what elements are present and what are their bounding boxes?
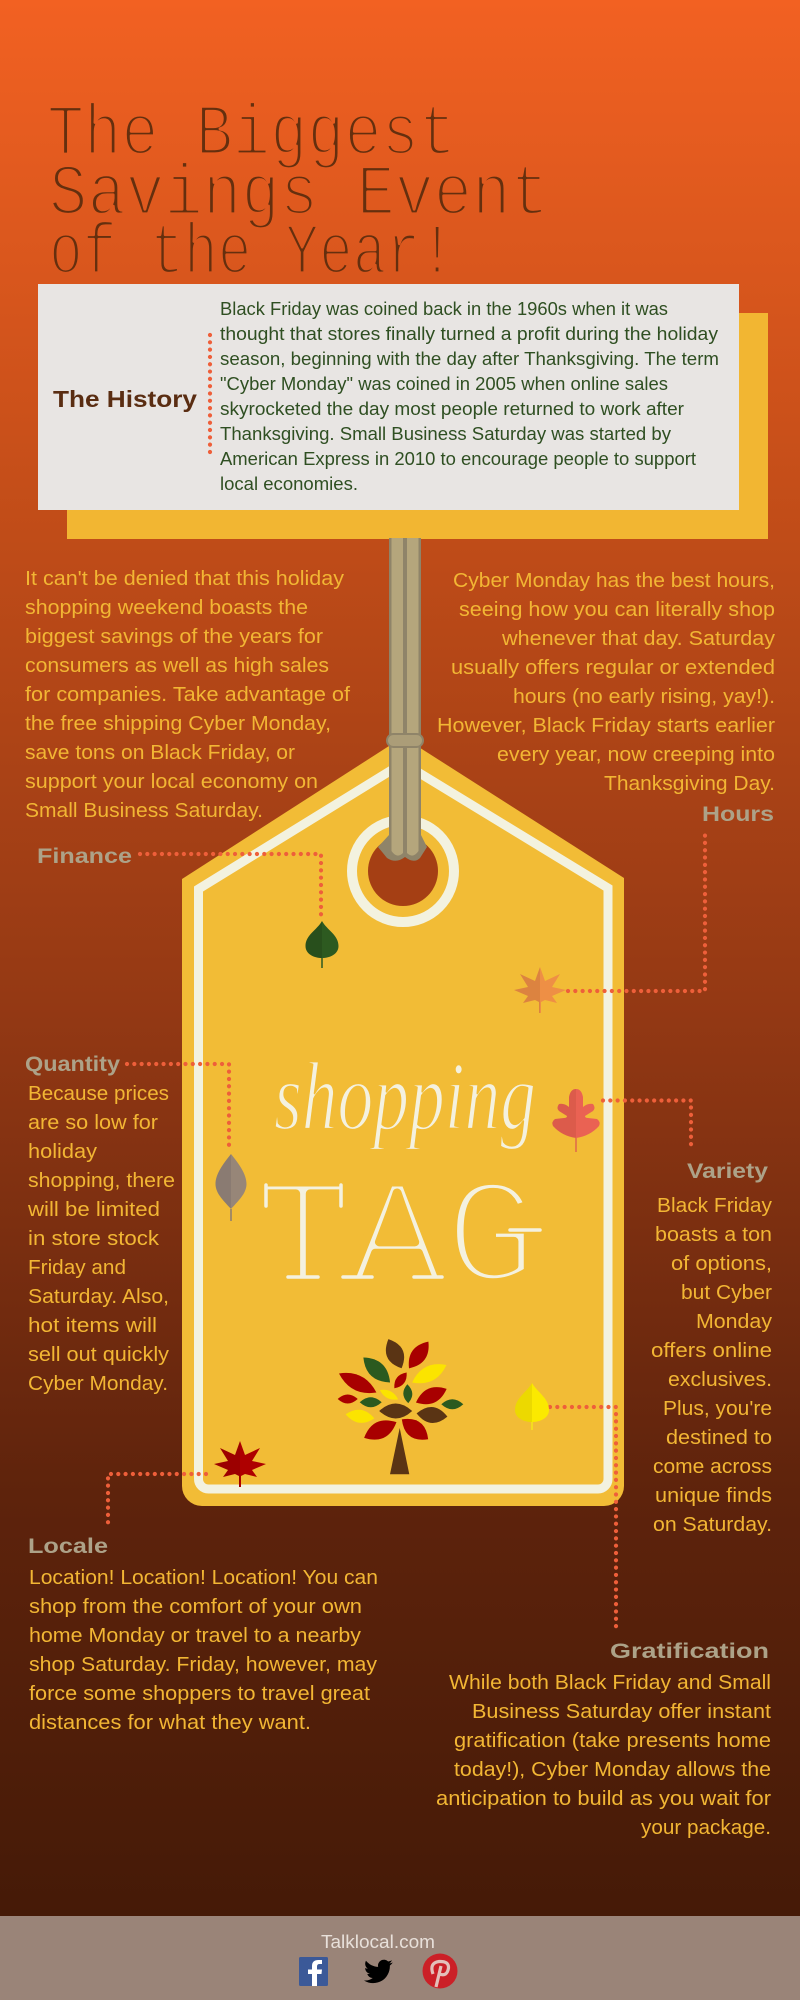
text block: gratification: gratification (take presents home [454, 1730, 771, 1752]
text block: locale: Location! Location! Location! You can [29, 1567, 378, 1589]
connector: variety [603, 1100, 691, 1151]
icon: grey leaf [216, 1154, 246, 1221]
history text: local economies. [220, 474, 358, 494]
text block: gratification: While both Black Friday and Small [449, 1672, 771, 1694]
text block: locale: shop Saturday. Friday, however, may [29, 1654, 377, 1676]
connector: locale [108, 1474, 206, 1527]
text block: variety: Monday [696, 1311, 772, 1333]
history text: thought that stores finally turned a profit during the holiday [220, 324, 718, 344]
icon: red maple leaf [214, 1441, 266, 1487]
label: variety: Variety [687, 1160, 768, 1183]
text block: gratification [436, 1672, 771, 1839]
connector: gratification [550, 1407, 616, 1630]
text block: locale: force some shoppers to travel great [29, 1683, 370, 1705]
text block: hours: However, Black Friday starts earlier [437, 715, 775, 737]
text block: hours: Cyber Monday has the best hours, [453, 570, 775, 592]
text block: hours: hours (no early rising, yay!). [513, 686, 775, 708]
text block: gratification: your package. [641, 1817, 771, 1839]
text block: locale: distances for what they want. [29, 1712, 311, 1734]
footer band [0, 1916, 800, 2000]
text block: variety: come across [653, 1456, 772, 1478]
heading: shopping: shopping [274, 1043, 536, 1150]
tag hole ring [352, 820, 454, 922]
text block: quantity [27, 1083, 175, 1395]
footer website: Talklocal.com [321, 1932, 435, 1952]
text block: variety: Plus, you're [663, 1398, 772, 1420]
text block: quantity: will be limited [27, 1199, 160, 1221]
text block: locale: home Monday or travel to a nearby [29, 1625, 361, 1647]
text block: quantity: are so low for [28, 1112, 158, 1134]
history text: Black Friday was coined back in the 1960s when it was [220, 299, 668, 319]
icon: pinterest [422, 1954, 458, 1988]
text block: quantity: Friday and [28, 1257, 126, 1279]
connector: hours [568, 830, 705, 991]
icon: yellow leaf [515, 1383, 549, 1430]
panel: the history [38, 284, 768, 539]
text block: hours: every year, now creeping into [497, 744, 775, 766]
heading: the history: The History [53, 386, 197, 412]
text block: variety [651, 1195, 772, 1536]
text block: quantity: shopping, there [28, 1170, 175, 1192]
text block: intro left: consumers as well as high sales [25, 655, 329, 677]
icon: green leaf [306, 921, 338, 968]
text block: gratification: Business Saturday offer instant [472, 1701, 771, 1723]
icon: twitter [364, 1960, 393, 1983]
text block: intro left: Small Business Saturday. [25, 800, 263, 822]
text block: quantity: holiday [28, 1141, 97, 1163]
dotted divider [208, 335, 212, 458]
text block: variety: unique finds [655, 1485, 772, 1507]
icon: orange maple leaf [514, 967, 566, 1013]
yellow backing panel [67, 313, 768, 539]
text block: intro left: biggest savings of the years for [25, 626, 323, 648]
text block: quantity: Cyber Monday. [28, 1373, 168, 1395]
icon: tree [336, 1336, 463, 1474]
tag body [182, 737, 624, 1506]
history text: skyrocketed the day most people returned to work after [220, 399, 684, 419]
text block: hours: Thanksgiving Day. [604, 773, 775, 795]
tag hole [368, 836, 438, 906]
text block: variety: Black Friday [657, 1195, 772, 1217]
text block: variety: of options, [671, 1253, 772, 1275]
tag cord [378, 538, 427, 861]
text block: intro left: It can't be denied that this holiday [25, 568, 344, 590]
text block: variety: boasts a ton [655, 1224, 772, 1246]
label: gratification: Gratification [610, 1640, 769, 1663]
history text [220, 299, 719, 494]
connector: finance [140, 854, 321, 915]
text block: variety: on Saturday. [653, 1514, 772, 1536]
text block: quantity: in store stock [28, 1228, 160, 1250]
text block: gratification: today!), Cyber Monday allows the [454, 1759, 771, 1781]
footer [0, 1916, 800, 2000]
text block: locale: shop from the comfort of your own [29, 1596, 362, 1618]
text block: intro left: the free shipping Cyber Monday, [25, 713, 331, 735]
label: quantity: Quantity [25, 1053, 120, 1076]
tag inner border [198, 763, 608, 1489]
text block: quantity: Because prices [28, 1083, 169, 1105]
text block: intro left: save tons on Black Friday, or [25, 742, 295, 764]
icon: facebook [299, 1957, 328, 1986]
text block: hours [437, 570, 775, 795]
label: finance: Finance [37, 845, 132, 868]
text block: quantity: hot items will [28, 1315, 157, 1337]
history text: season, beginning with the day after Thanksgiving. The term [220, 349, 719, 369]
text block: variety: exclusives. [668, 1369, 772, 1391]
label: locale: Locale [28, 1535, 108, 1558]
text block: variety: but Cyber [681, 1282, 772, 1304]
text block: hours: whenever that day. Saturday [501, 628, 775, 650]
title: The Biggest [47, 94, 456, 176]
text block: gratification: anticipation to build as you wait for [436, 1788, 771, 1810]
slab serifs [266, 1185, 540, 1277]
text block: intro left: for companies. Take advantage of [25, 684, 350, 706]
text block: quantity: sell out quickly [28, 1344, 169, 1366]
text block: variety: destined to [666, 1427, 772, 1449]
history text: Thanksgiving. Small Business Saturday was started by [220, 424, 671, 444]
heading: tag: TAG [256, 1157, 538, 1327]
light text panel [38, 284, 739, 510]
connector: quantity [127, 1064, 229, 1146]
title: of the Year! [49, 213, 454, 295]
text block: intro left: support your local economy on [25, 771, 318, 793]
text block: hours: seeing how you can literally shop [459, 599, 775, 621]
label: hours: Hours [702, 803, 774, 826]
title: Savings Event [49, 154, 549, 236]
text block: variety: offers online [651, 1340, 772, 1362]
shopping tag [182, 737, 624, 1506]
cord knot [387, 734, 423, 747]
title [47, 94, 549, 295]
history text: "Cyber Monday" was coined in 2005 when online sales [220, 374, 668, 394]
text block: intro left: shopping weekend boasts the [25, 597, 308, 619]
text block: hours: usually offers regular or extended [451, 657, 775, 679]
text block: locale [29, 1567, 378, 1734]
history text: American Express in 2010 to encourage people to support [220, 449, 696, 469]
icon: oak leaf [552, 1089, 600, 1152]
text block: quantity: Saturday. Also, [28, 1286, 169, 1308]
text block: intro left [25, 568, 350, 822]
